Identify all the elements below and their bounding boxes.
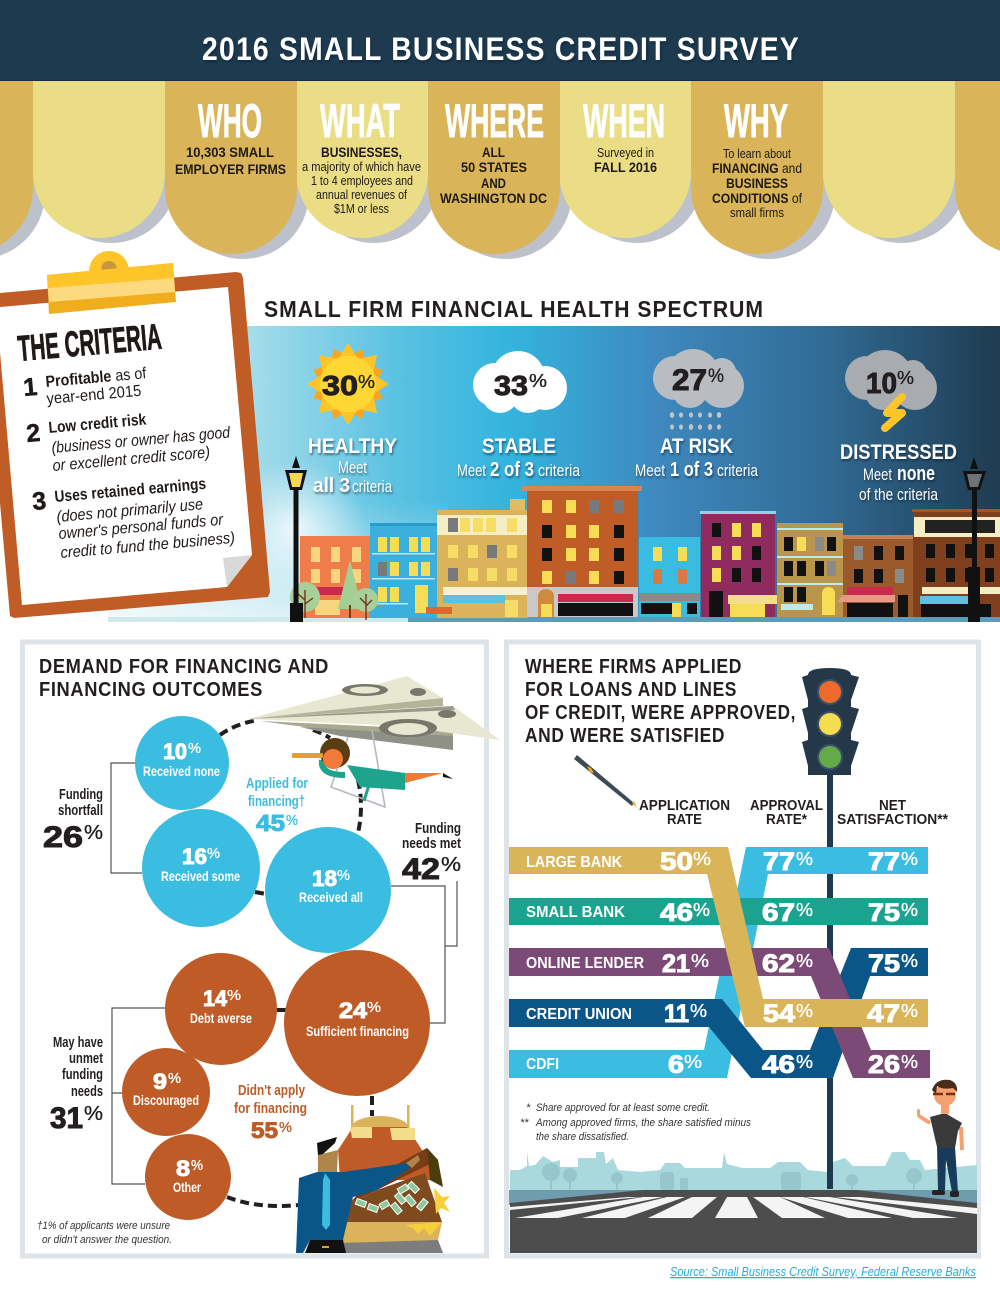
column headings: NET — [879, 798, 906, 814]
when column — [583, 94, 665, 175]
label: at risk: Meet — [635, 461, 665, 480]
net satisfaction values: % — [901, 1052, 918, 1072]
net satisfaction values — [867, 848, 918, 1079]
label: funding shortfall: % — [84, 822, 103, 844]
why column: BUSINESS — [726, 175, 788, 191]
circle: other: Other — [173, 1179, 201, 1195]
circle: debt averse: 14 — [203, 986, 228, 1011]
bracket: funding needs met — [391, 881, 457, 1023]
label: at risk: AT RISK — [660, 435, 733, 458]
circle: received some: % — [207, 845, 220, 862]
footnotes: Among approved firms, the share satisfied minus — [535, 1117, 751, 1129]
label: applied for financing: Applied for — [246, 775, 308, 792]
bench — [426, 607, 452, 614]
criterion 3: Uses retained earnings — [54, 476, 207, 506]
net satisfaction values: 77 — [868, 848, 900, 876]
chest interior — [343, 1173, 442, 1222]
criterion 1: 1 — [22, 373, 38, 402]
clipboard: the criteria — [0, 251, 270, 618]
circle: received none: 10 — [163, 739, 187, 764]
building: dark brown — [912, 509, 1000, 617]
ribbon: small bank — [509, 898, 928, 925]
spectrum heading: SMALL FIRM FINANCIAL HEALTH SPECTRUM — [264, 296, 764, 322]
column headings: APPLICATION — [639, 798, 730, 814]
column headings — [639, 798, 948, 828]
panel heading: OF CREDIT, WERE APPROVED, — [525, 702, 796, 724]
label: healthy — [308, 435, 397, 497]
approval rate values: 54 — [763, 1000, 795, 1028]
label: healthy: criteria — [352, 477, 392, 496]
paper sheet — [0, 287, 252, 605]
label: funding shortfall: shortfall — [58, 802, 103, 819]
label: may have unmet funding needs: 31 — [50, 1102, 83, 1135]
application rate values: % — [693, 849, 711, 869]
circle: discouraged: 9 — [153, 1069, 167, 1094]
net satisfaction values: 47 — [867, 1000, 900, 1028]
label: applied for financing: 45 — [256, 810, 285, 836]
label: applied for financing — [246, 775, 308, 836]
icon: traffic light — [802, 668, 859, 775]
panel: demand for financing — [22, 642, 500, 1256]
column headings: RATE* — [766, 812, 807, 828]
criteria title: THE CRITERIA — [16, 316, 163, 369]
why column: To learn about — [723, 146, 791, 161]
circle: received none: % — [188, 740, 201, 757]
circle: sufficient financing: Sufficient financing — [306, 1023, 409, 1039]
label: distressed: DISTRESSED — [840, 441, 957, 464]
label: funding needs met — [402, 820, 461, 886]
why column: FINANCING and — [712, 160, 802, 176]
panel heading: DEMAND FOR FINANCING AND — [39, 656, 329, 678]
label: may have unmet funding needs: funding — [62, 1066, 103, 1083]
label: at risk: 1 of 3 — [670, 459, 713, 481]
footnote: applicants: †1% of applicants were unsure — [37, 1220, 170, 1232]
where column — [440, 94, 547, 206]
footnote: applicants: or didn't answer the question. — [42, 1234, 172, 1246]
row labels: SMALL BANK — [526, 904, 625, 921]
label: healthy: Meet — [338, 458, 367, 477]
label: did not apply: 55 — [251, 1118, 278, 1143]
label: funding shortfall: 26 — [43, 821, 83, 854]
circle: received all: Received all — [299, 889, 363, 905]
application rate values: % — [690, 1001, 707, 1021]
spectrum sky background — [108, 326, 1000, 622]
why column: WHY — [724, 94, 788, 147]
when column: WHEN — [583, 94, 665, 147]
building: bright blue — [639, 537, 700, 617]
icon: pen — [574, 755, 637, 808]
footnotes: ** — [520, 1117, 529, 1129]
criterion 2: 2 — [25, 419, 41, 448]
lid sleeve — [350, 1148, 438, 1203]
where column: WHERE — [445, 94, 544, 147]
cloud icon: distressed with lightning: 10 — [866, 368, 897, 400]
circle: received some — [142, 809, 260, 927]
what column — [302, 94, 421, 216]
where column: ALL — [482, 144, 505, 160]
panel heading — [525, 656, 796, 747]
circle: received some: 16 — [182, 844, 207, 869]
net satisfaction values: % — [901, 900, 918, 920]
cloud icon: stable: 33 — [494, 370, 528, 401]
circle: received some: Received some — [161, 868, 240, 884]
label: stable: STABLE — [482, 435, 556, 458]
application rate values: 21 — [662, 950, 690, 978]
approval rate values: % — [796, 1001, 813, 1021]
circle: other: % — [191, 1157, 203, 1174]
what column: a majority of which have — [302, 159, 421, 174]
icon: woman on glider with telescope — [292, 730, 453, 807]
net satisfaction values: % — [901, 951, 918, 971]
label: stable: Meet — [457, 461, 486, 480]
panel heading: FOR LOANS AND LINES — [525, 679, 737, 701]
label: healthy: all 3 — [313, 475, 350, 497]
label: did not apply — [234, 1082, 307, 1143]
label: may have unmet funding needs — [50, 1034, 103, 1135]
circle: other: 8 — [176, 1156, 190, 1181]
approval rate values: % — [796, 951, 813, 971]
man body — [296, 1163, 410, 1253]
sun icon: healthy: 30 — [322, 370, 358, 401]
bracket: funding shortfall — [111, 763, 142, 873]
label: applied for financing: financing† — [248, 793, 305, 810]
money — [355, 1181, 428, 1215]
ribbon: large bank — [509, 847, 928, 1027]
building: salmon — [300, 536, 370, 618]
application rate values: % — [693, 900, 710, 920]
label: funding needs met: needs met — [402, 835, 461, 852]
approval rate values: 62 — [762, 950, 795, 978]
application rate values: 11 — [664, 1000, 689, 1028]
circle: discouraged: % — [168, 1070, 181, 1087]
net satisfaction values: 75 — [868, 950, 900, 978]
cloud icon: at risk with rain — [653, 349, 744, 430]
panel heading: AND WERE SATISFIED — [525, 725, 725, 747]
criterion 1: year-end 2015 — [46, 383, 142, 408]
net satisfaction values: % — [901, 1001, 918, 1021]
building: blue with yellow windows — [370, 523, 437, 618]
why column — [712, 94, 802, 220]
awning — [0, 81, 1000, 259]
application rate values: % — [691, 951, 709, 971]
panel heading: WHERE FIRMS APPLIED — [525, 656, 742, 678]
panel heading: FINANCING OUTCOMES — [39, 679, 263, 701]
circle: other — [145, 1134, 231, 1220]
cloud icon: distressed with lightning — [845, 350, 937, 428]
row labels: CDFI — [526, 1056, 559, 1073]
label: may have unmet funding needs: % — [84, 1103, 103, 1125]
application rate values: 6 — [668, 1051, 684, 1079]
cloud icon: stable: % — [529, 371, 547, 391]
what column: annual revenues of — [316, 187, 407, 202]
street lamp left — [285, 456, 307, 622]
who column: WHO — [198, 94, 262, 147]
street lamp right — [963, 457, 986, 622]
circle: debt averse — [165, 953, 277, 1065]
when column: Surveyed in — [597, 145, 654, 160]
row labels: CREDIT UNION — [526, 1006, 632, 1023]
label: funding needs met: 42 — [402, 853, 440, 886]
label: distressed: none — [897, 463, 935, 485]
bracket: unmet funding needs — [112, 1008, 165, 1184]
label: healthy: HEALTHY — [308, 435, 397, 458]
skyline — [510, 1152, 977, 1190]
label: funding shortfall — [43, 786, 103, 854]
net satisfaction values: % — [901, 849, 918, 869]
why column: small firms — [730, 205, 784, 220]
panel: where firms applied — [506, 642, 978, 1256]
label: at risk: criteria — [717, 461, 758, 480]
circle: debt averse: % — [227, 987, 241, 1004]
footnotes: the share dissatisfied. — [536, 1131, 629, 1143]
circle: received all: % — [337, 867, 350, 884]
icon: man thumbs up — [917, 1080, 962, 1197]
street buildings — [108, 486, 1000, 622]
where column: 50 STATES — [461, 159, 527, 175]
criterion 2: (business or owner has good — [51, 424, 232, 457]
header banner — [0, 0, 1000, 82]
criterion 2: or excellent credit score) — [52, 444, 211, 475]
label: distressed: Meet — [863, 465, 892, 484]
label: funding shortfall: Funding — [59, 786, 103, 803]
net satisfaction values: 75 — [868, 899, 900, 927]
application rate values: 46 — [660, 899, 693, 927]
approval rate values: 46 — [762, 1051, 795, 1079]
approval rate values: 67 — [762, 899, 795, 927]
who column: EMPLOYER FIRMS — [175, 161, 286, 177]
circle: sufficient financing: 24 — [339, 998, 368, 1023]
ground strip — [108, 617, 1000, 622]
application rate values: % — [684, 1052, 702, 1072]
footnote: applicants — [37, 1220, 172, 1246]
application rate values — [660, 848, 711, 1079]
label: did not apply: % — [279, 1119, 292, 1136]
criterion 3: credit to fund the business) — [60, 530, 236, 562]
approval rate values: 77 — [763, 848, 795, 876]
circle: received all — [265, 827, 391, 953]
label: stable: 2 of 3 — [490, 459, 534, 481]
traffic light post — [827, 775, 833, 1189]
sun icon: healthy — [307, 343, 389, 425]
circle: sufficient financing — [284, 950, 430, 1096]
column headings: SATISFACTION** — [837, 812, 948, 828]
row labels: ONLINE LENDER — [526, 955, 644, 972]
ribbon: credit union — [509, 948, 928, 1078]
label: at risk — [635, 435, 758, 481]
ribbon: online lender — [509, 948, 930, 1078]
building: brown — [837, 535, 913, 617]
label: applied for financing: % — [286, 812, 298, 829]
icon: man with treasure chest — [296, 1105, 450, 1253]
building: olive tan — [777, 523, 843, 617]
sun icon: healthy: % — [358, 372, 375, 392]
criterion 3: (does not primarily use — [56, 496, 204, 526]
who column: 10,303 SMALL — [186, 144, 274, 160]
sparkle — [434, 1188, 450, 1214]
what column: 1 to 4 employees and — [311, 173, 413, 188]
label: did not apply: for financing — [234, 1100, 307, 1117]
clip — [47, 251, 176, 314]
cloud icon: stable — [473, 351, 567, 413]
why column: CONDITIONS of — [712, 190, 802, 206]
approval rate values: % — [796, 849, 813, 869]
label: did not apply: Didn't apply — [238, 1082, 306, 1099]
label: stable: criteria — [538, 461, 580, 480]
label: funding needs met: Funding — [415, 820, 461, 837]
building: tan with cream top — [437, 499, 527, 618]
label: may have unmet funding needs: unmet — [69, 1050, 103, 1067]
row labels — [526, 854, 644, 1073]
label: distressed — [840, 441, 957, 504]
circle: received all: 18 — [312, 866, 337, 891]
circle: discouraged: Discouraged — [133, 1092, 199, 1108]
criterion 2 — [25, 412, 232, 475]
building: large orange — [522, 486, 642, 617]
approval rate values: % — [796, 900, 813, 920]
cloud icon: at risk with rain: % — [708, 366, 724, 387]
label: distressed: of the criteria — [859, 485, 938, 504]
crosswalk road — [509, 1190, 977, 1253]
page fold — [223, 555, 252, 587]
circle: discouraged — [122, 1048, 210, 1136]
circle: received none — [135, 716, 229, 810]
label: may have unmet funding needs: May have — [53, 1034, 103, 1051]
criterion 3 — [31, 476, 236, 562]
row labels: LARGE BANK — [526, 854, 622, 871]
when column: FALL 2016 — [594, 159, 657, 175]
circle: debt averse: Debt averse — [190, 1010, 252, 1026]
footnotes: Share approved for at least some credit. — [536, 1102, 710, 1114]
label: may have unmet funding needs: needs — [71, 1083, 103, 1100]
what column: WHAT — [320, 94, 400, 147]
ribbon: cdfi — [509, 847, 928, 1078]
footnotes: * — [526, 1102, 531, 1114]
street trees — [290, 560, 378, 620]
net satisfaction values: 26 — [868, 1051, 900, 1079]
cloud icon: at risk with rain: 27 — [672, 364, 707, 397]
criterion 2: Low credit risk — [48, 412, 147, 437]
who column — [175, 94, 286, 177]
criterion 1 — [22, 365, 147, 408]
title: 2016 SMALL BUSINESS CREDIT SURVEY — [202, 31, 800, 67]
application rate values: 50 — [660, 848, 693, 876]
column headings: APPROVAL — [750, 798, 823, 814]
dashed ring — [220, 720, 372, 1206]
what column: $1M or less — [334, 201, 389, 216]
icon: dollar paper plane — [248, 676, 500, 750]
panel heading — [39, 656, 329, 701]
label: funding needs met: % — [441, 854, 461, 876]
approval rate values — [762, 848, 813, 1079]
approval rate values: % — [796, 1052, 813, 1072]
label: stable — [457, 435, 580, 481]
what column: BUSINESSES, — [321, 144, 402, 160]
footnotes — [520, 1102, 751, 1143]
circle: received none: Received none — [143, 763, 220, 779]
cloud icon: distressed with lightning: % — [897, 368, 914, 388]
circle: sufficient financing: % — [367, 999, 381, 1016]
criterion 3: owner's personal funds or — [58, 512, 224, 543]
column headings: RATE — [667, 812, 702, 828]
building: magenta — [700, 511, 777, 617]
criterion 3: 3 — [31, 487, 47, 516]
criterion 1: Profitable as of — [45, 365, 147, 391]
where column: WASHINGTON DC — [440, 190, 547, 206]
where column: AND — [481, 175, 506, 191]
